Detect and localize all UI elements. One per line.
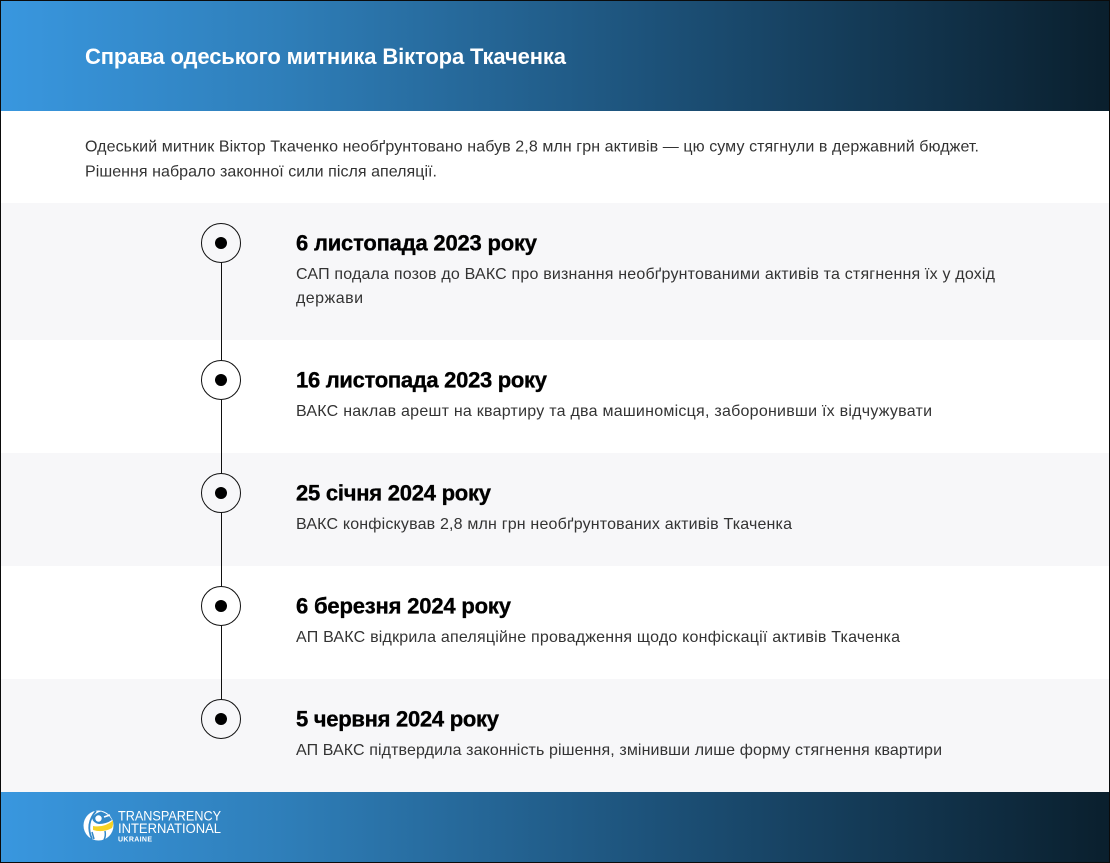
- timeline event: 6 березня 2024: [202, 586, 900, 646]
- timeline line: [220, 243, 222, 719]
- logo text: UKRAINE: [118, 836, 152, 844]
- description: АП ВАКС відкрила апеляційне провадження щодо конфіскації активів Ткаченка: [296, 629, 900, 646]
- marker: [202, 224, 240, 262]
- date: 25 січня 2024 року: [296, 480, 492, 506]
- timeline event: 6 листопада 2023: [202, 224, 996, 307]
- date: 6 березня 2024 року: [296, 594, 512, 618]
- timeline event: 25 січня 2024: [202, 474, 792, 533]
- marker: [202, 700, 240, 738]
- timeline event: 5 червня 2024: [202, 700, 942, 759]
- header banner: [0, 0, 1110, 111]
- marker: [202, 360, 240, 400]
- logo text: [118, 808, 222, 844]
- date: 6 листопада 2023 року: [296, 230, 538, 256]
- timeline event: 16 листопада 2023: [202, 360, 932, 420]
- title: Справа одеського митника Віктора Ткаченка: [85, 44, 567, 69]
- marker: [202, 474, 240, 512]
- description: САП подала позов до ВАКС про визнання необґрунтованими активів та стягнення їх у дохід: [296, 266, 996, 283]
- intro text: Одеський митник Віктор Ткаченко необґрунтовано набув 2,8 млн грн активів — цю суму стягнули в державний бюджет.: [85, 138, 979, 156]
- description: ВАКС конфіскував 2,8 млн грн необґрунтованих активів Ткаченка: [296, 516, 792, 533]
- intro text: [85, 138, 979, 180]
- footer banner: [0, 792, 1110, 863]
- description: АП ВАКС підтвердила законність рішення, змінивши лише форму стягнення квартири: [296, 742, 942, 759]
- panel: row backgrounds: [0, 203, 1110, 792]
- logo text: INTERNATIONAL: [118, 820, 221, 836]
- icon: Transparency International globe: [84, 810, 114, 840]
- description: [296, 266, 996, 307]
- logo text: TRANSPARENCY: [118, 808, 222, 824]
- description: ВАКС наклав арешт на квартиру та два машиномісця, заборонивши їх відчужувати: [296, 403, 932, 420]
- date: 16 листопада 2023 року: [296, 368, 548, 392]
- marker: [202, 586, 240, 626]
- intro text: Рішення набрало законної сили після апеляції.: [85, 164, 437, 180]
- description: держави: [296, 290, 363, 307]
- date: 5 червня 2024 року: [296, 706, 500, 732]
